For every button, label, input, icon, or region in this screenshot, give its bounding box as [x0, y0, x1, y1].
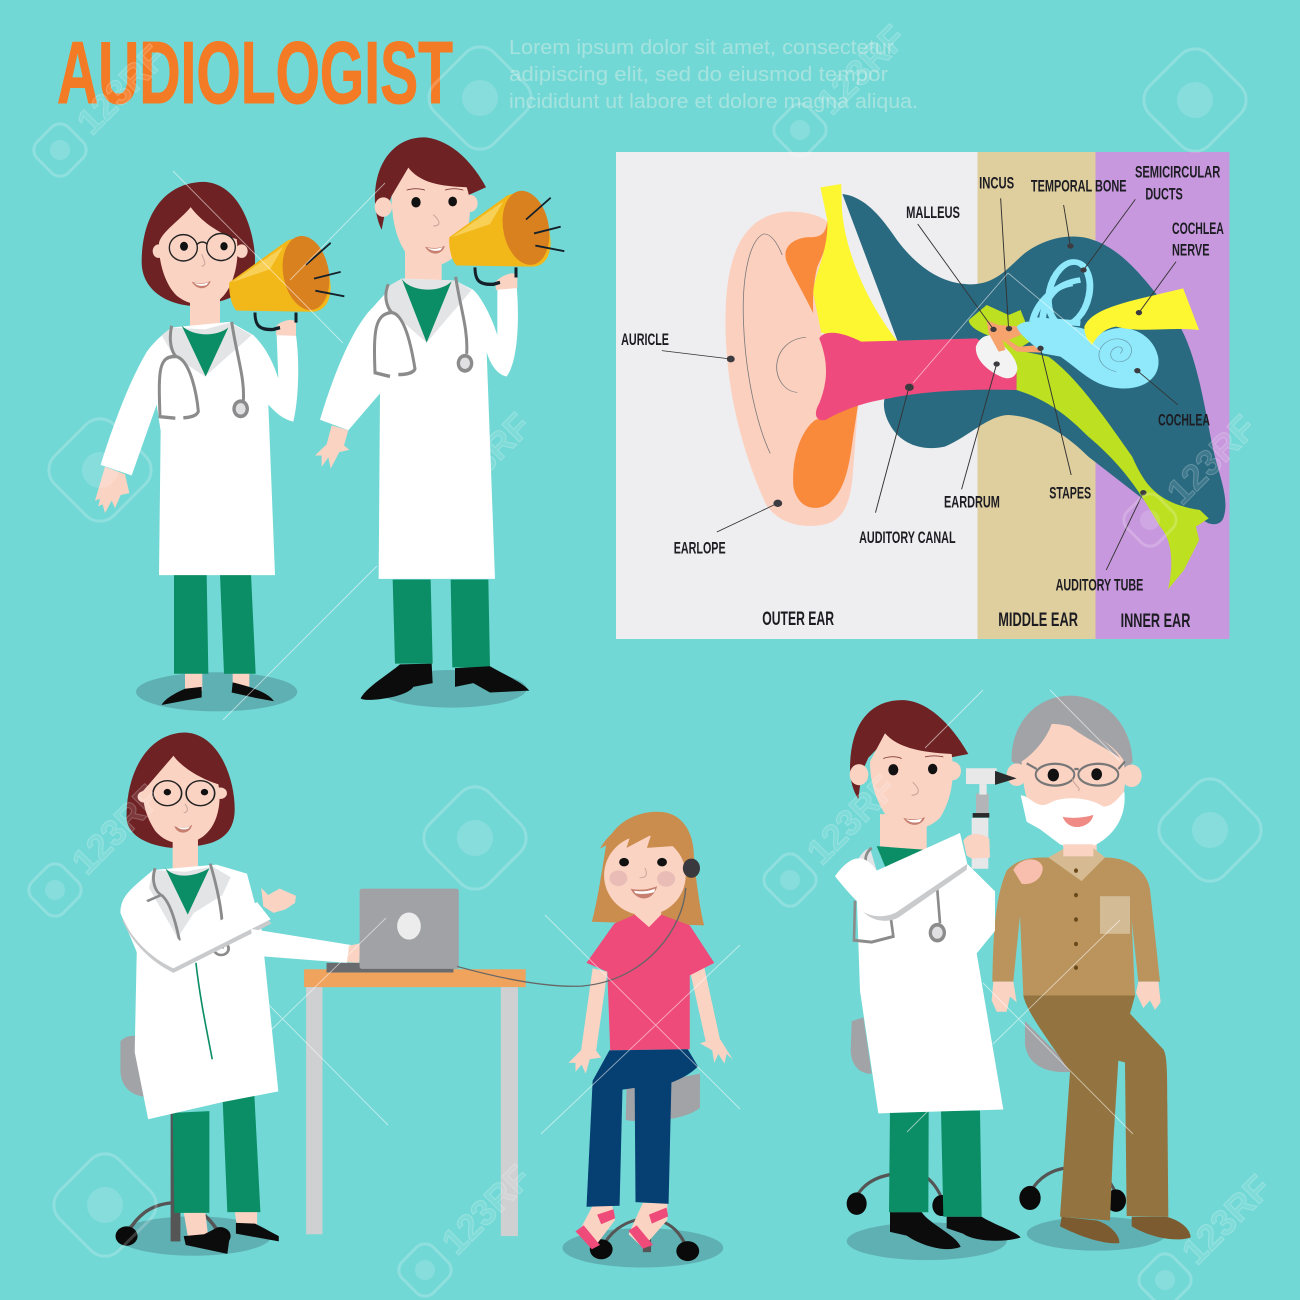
part labels: COCHLEA — [1172, 219, 1224, 238]
otoscope — [963, 768, 1043, 884]
table — [304, 969, 526, 1236]
male doctor — [315, 137, 529, 708]
megaphone: female doctor — [229, 230, 344, 330]
part labels: TEMPORAL BONE — [1031, 176, 1127, 195]
part labels: SEMICIRCULAR — [1135, 162, 1220, 181]
elderly patient — [992, 696, 1191, 1243]
stock watermarks: 123RF — [1158, 407, 1264, 512]
auditory canal — [816, 333, 1017, 420]
cochlea spiral — [1099, 339, 1132, 372]
title: AUDIOLOGIST — [57, 23, 453, 122]
part labels: AUDITORY TUBE — [1056, 575, 1143, 594]
middle ear zone — [978, 152, 1095, 639]
auricle — [725, 212, 858, 526]
part labels: NERVE — [1172, 240, 1209, 259]
intro text: incididunt ut labore et dolore magna aliqua. — [509, 90, 918, 113]
cartilage upper — [785, 222, 828, 313]
cochlea nerve — [1084, 288, 1199, 345]
auditory tube — [969, 305, 1209, 589]
part labels: STAPES — [1049, 483, 1091, 502]
stock watermarks: 123RF — [68, 37, 174, 142]
megaphone: male doctor — [449, 185, 564, 284]
stock watermarks: 123RF — [433, 405, 539, 510]
intro text — [509, 36, 918, 113]
stock watermarks: 123RF — [433, 1157, 539, 1262]
female doctor seated view — [120, 732, 360, 1254]
female doctor — [95, 182, 298, 711]
part labels — [621, 162, 1224, 632]
part labels: INNER EAR — [1121, 610, 1190, 632]
ear fold lines — [743, 234, 806, 453]
part labels: EARDRUM — [944, 492, 1000, 511]
part labels: MIDDLE EAR — [998, 609, 1078, 631]
stock watermarks: 123RF — [808, 17, 914, 122]
ossicles — [987, 320, 1052, 353]
stock watermarks: 123RF — [1173, 1167, 1279, 1272]
part labels: INCUS — [979, 173, 1014, 192]
cartilage lower — [793, 405, 858, 508]
inner ear zone — [1095, 152, 1229, 639]
headphone cord — [457, 888, 686, 986]
intro text: adipiscing elit, sed do eiusmod tempor — [509, 63, 888, 86]
semicircular ducts — [1033, 259, 1095, 327]
yellow cartilage — [813, 184, 898, 343]
male doctor with otoscope — [835, 700, 1021, 1249]
part labels: MALLEUS — [906, 203, 960, 222]
part labels: OUTER EAR — [762, 608, 834, 630]
stool and chair — [847, 1017, 1167, 1260]
callout lines — [662, 198, 1178, 570]
part labels: AURICLE — [621, 330, 669, 349]
part labels: COCHLEA — [1158, 410, 1210, 429]
doctor stool — [116, 1036, 271, 1256]
panel: ear anatomy diagram — [616, 152, 1229, 639]
part labels: AUDITORY CANAL — [859, 528, 956, 547]
temporal bone — [842, 194, 1225, 524]
scene: otoscope examination — [835, 696, 1191, 1260]
outer ear zone — [616, 152, 978, 639]
callout dots — [727, 243, 1147, 507]
stock watermarks: 123RF — [798, 767, 904, 872]
eardrum — [976, 335, 1017, 378]
stock watermarks: 123RF — [63, 777, 169, 882]
girl patient — [562, 812, 733, 1267]
scene: two doctors with megaphones — [95, 137, 564, 711]
part labels: EARLOPE — [674, 538, 726, 557]
part labels: DUCTS — [1145, 184, 1183, 203]
scene: hearing test — [116, 732, 733, 1267]
cochlea — [1017, 321, 1159, 389]
laptop — [327, 889, 459, 972]
intro text: Lorem ipsum dolor sit amet, consectetur — [509, 36, 894, 59]
